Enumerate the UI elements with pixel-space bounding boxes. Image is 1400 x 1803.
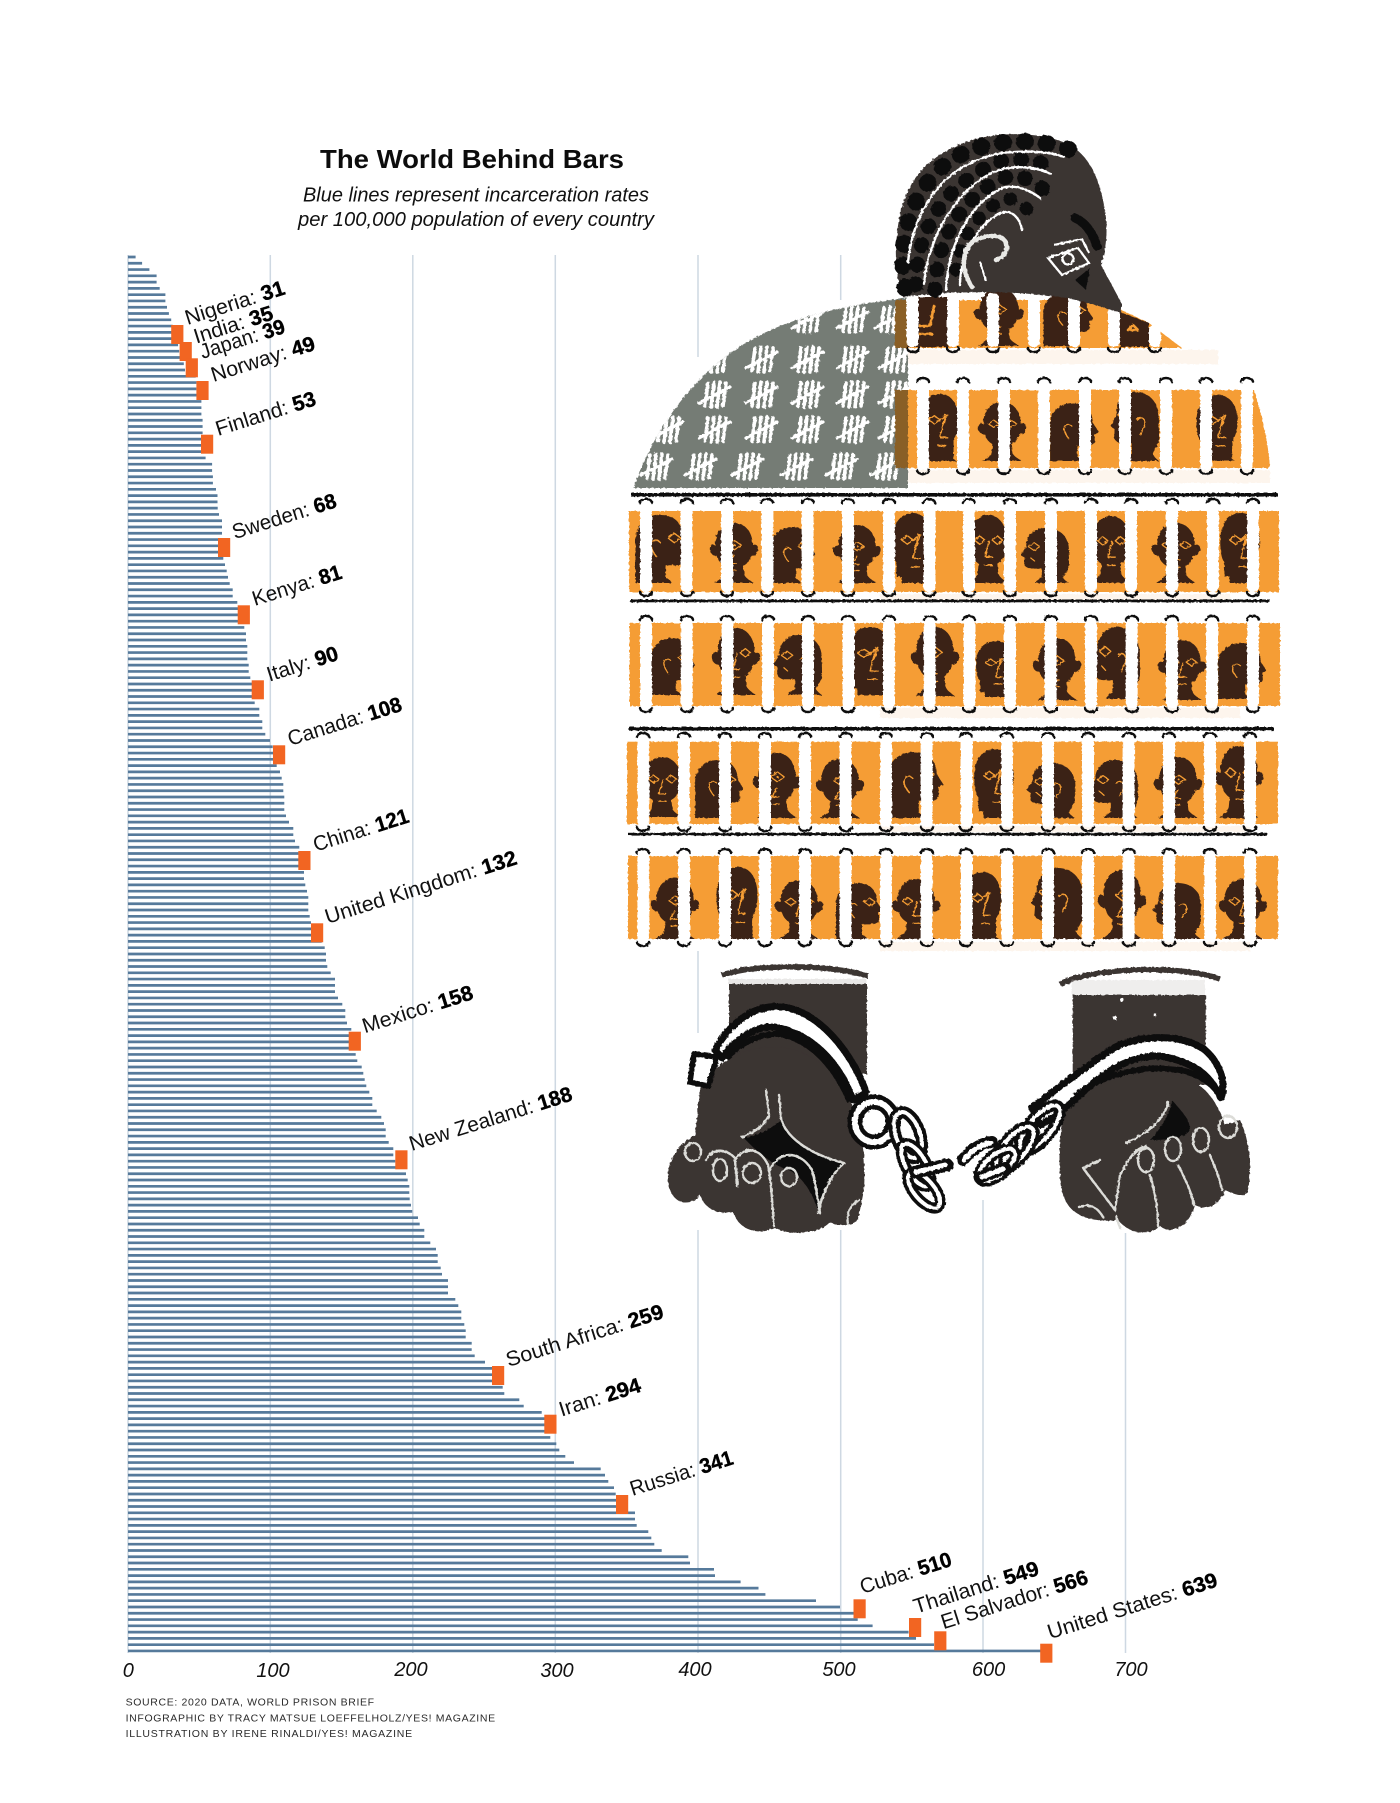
- country value labels: Russia: 341: [627, 1447, 736, 1501]
- country value labels: Iran: 294: [556, 1374, 644, 1421]
- shoulder: grey tally panel: [634, 297, 910, 488]
- row 2 of bars: [895, 378, 1270, 474]
- axis labels: 300: [540, 1660, 574, 1682]
- footer credits: ILLUSTRATION BY IRENE RINALDI/YES! MAGAZINE: [126, 1728, 412, 1740]
- country value labels: China: 121: [310, 805, 412, 856]
- country value labels: India: 35: [191, 302, 276, 348]
- eyebrow: [1075, 218, 1097, 246]
- illustration: incarcerated figure: [627, 134, 1280, 1233]
- country value labels: El Salvador: 566: [938, 1566, 1091, 1634]
- orange country markers: [171, 325, 1052, 1663]
- subtitle: per 100,000 population of every country: [297, 209, 655, 231]
- footer credits: INFOGRAPHIC BY TRACY MATSUE LOEFFELHOLZ/YES! MAGAZINE: [126, 1712, 495, 1724]
- country value labels: Kenya: 81: [249, 561, 345, 611]
- subtitle: Blue lines represent incarceration rates: [303, 184, 649, 206]
- speckled shadow under rows: [880, 350, 1270, 951]
- row 6 of bars: [628, 849, 1278, 946]
- right hand in handcuff: [1032, 970, 1250, 1233]
- axis labels: [123, 1659, 1148, 1682]
- chart gridlines: [128, 255, 1126, 1653]
- country value labels: Finland: 53: [213, 388, 319, 441]
- left hand in handcuff: [668, 967, 868, 1233]
- footer credits: SOURCE: 2020 DATA, WORLD PRISON BRIEF: [126, 1696, 374, 1708]
- axis labels: 200: [393, 1659, 428, 1681]
- country value labels: South Africa: 259: [503, 1301, 666, 1372]
- country value labels: New Zealand: 188: [406, 1083, 575, 1156]
- axis labels: 700: [1114, 1659, 1148, 1681]
- footer credits: [126, 1696, 495, 1740]
- country value labels: United States: 639: [1045, 1569, 1220, 1644]
- axis labels: 400: [678, 1659, 712, 1681]
- row 4 of bars: [630, 616, 1280, 712]
- shelf lines: [628, 493, 1278, 836]
- left handcuff: [715, 1007, 866, 1100]
- left chain: [855, 1102, 947, 1213]
- country value labels: [182, 277, 1220, 1644]
- country value labels: Mexico: 158: [359, 981, 476, 1038]
- country value labels: Italy: 90: [264, 642, 341, 686]
- title: The World Behind Bars: [320, 144, 624, 174]
- country value labels: Norway: 49: [208, 332, 318, 387]
- country value labels: Japan: 39: [197, 315, 288, 364]
- country value labels: United Kingdom: 132: [322, 847, 520, 929]
- head with braids: [896, 134, 1122, 313]
- axis labels: 100: [256, 1660, 290, 1682]
- country value labels: Sweden: 68: [229, 490, 340, 544]
- right handcuff: [1032, 1038, 1223, 1125]
- right chain: [963, 1099, 1066, 1187]
- country value labels: Thailand: 549: [911, 1557, 1042, 1618]
- axis labels: 0: [123, 1660, 134, 1682]
- row 3 of bars: [629, 499, 1279, 596]
- axis labels: 600: [972, 1659, 1005, 1681]
- country value labels: Cuba: 510: [857, 1548, 955, 1599]
- subtitle: [297, 184, 655, 231]
- blue bar chart: incarceration rate per country: [128, 257, 1041, 1651]
- row 5 of bars: [627, 733, 1278, 831]
- shoulder row of bars: [895, 288, 1182, 352]
- country value labels: Canada: 108: [285, 693, 405, 751]
- eye: [1048, 239, 1089, 275]
- axis labels: 500: [822, 1659, 856, 1681]
- country value labels: Nigeria: 31: [182, 277, 288, 330]
